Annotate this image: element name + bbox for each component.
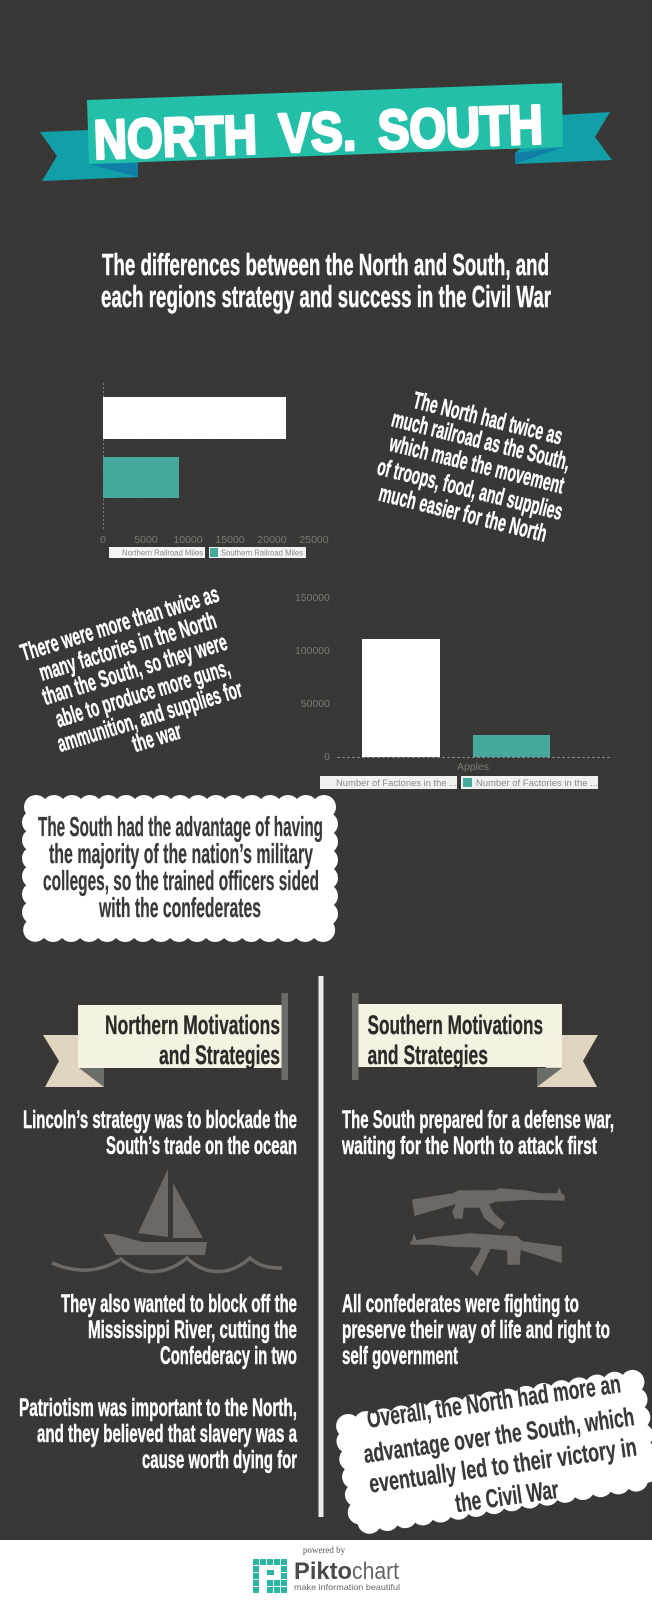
text: railroad advantage bbox=[374, 387, 573, 548]
center divider bbox=[318, 976, 324, 1517]
text: way of life bbox=[342, 1290, 610, 1370]
text: blockade strategy: South’s trade on the ocean bbox=[106, 1132, 297, 1160]
bar chart: railroad miles: 15000 bbox=[215, 534, 245, 546]
text: mississippi river: They also wanted to block off the bbox=[61, 1290, 297, 1318]
bar chart: factories: 100000 bbox=[295, 645, 330, 657]
bar chart: railroad miles: 5000 bbox=[134, 534, 158, 546]
footer: make information beautiful bbox=[294, 1582, 400, 1592]
title: NORTH bbox=[93, 103, 258, 171]
subtitle bbox=[101, 247, 551, 314]
text: blockade strategy: Lincoln’s strategy was to blockade the bbox=[23, 1106, 297, 1134]
text: factories advantage: able to produce more guns, bbox=[52, 654, 233, 733]
text: mississippi river: Mississippi River, cutting the bbox=[88, 1316, 297, 1344]
callout: military colleges: colleges, so the trained officers sided bbox=[43, 865, 319, 896]
text: way of life: self government bbox=[342, 1342, 458, 1370]
banner: northern heading: Northern Motivations bbox=[105, 1010, 280, 1040]
callout: military colleges: the majority of the nation’s military bbox=[49, 838, 313, 869]
text: patriotism: and they believed that slavery was a bbox=[37, 1420, 298, 1448]
title ribbon bbox=[40, 83, 612, 181]
bar chart: factories bbox=[295, 592, 612, 789]
text: patriotism: cause worth dying for bbox=[142, 1446, 297, 1474]
text: patriotism bbox=[19, 1394, 298, 1474]
powered by: powered by bbox=[303, 1545, 346, 1555]
banner: southern heading bbox=[352, 993, 598, 1087]
callout: overall conclusion: the Civil War bbox=[453, 1474, 560, 1518]
text: defense war bbox=[341, 1106, 614, 1160]
text: factories advantage: many factories in the North bbox=[36, 607, 220, 687]
icon: piktochart logo bbox=[253, 1559, 287, 1593]
bar chart: factories: Number of Factories in the ... bbox=[476, 778, 598, 788]
bar chart: factories: 50000 bbox=[301, 698, 330, 710]
text: factories advantage: than the South, so they were bbox=[39, 629, 231, 711]
piktochart wordmark: Pikto bbox=[294, 1558, 352, 1585]
callout: military colleges bbox=[34, 807, 326, 930]
title bbox=[93, 93, 544, 171]
bar chart: railroad miles: Southern Railroad Miles bbox=[221, 548, 303, 558]
icon: sailboat on waves bbox=[52, 1169, 282, 1272]
bar chart: factories: 0 bbox=[324, 751, 330, 763]
bar chart: railroad miles: 10000 bbox=[173, 534, 203, 546]
bar chart: factories: Apples bbox=[457, 761, 489, 773]
text: mississippi river bbox=[61, 1290, 297, 1370]
bar chart: railroad miles: 0 bbox=[100, 534, 106, 546]
bar chart: railroad miles: 25000 bbox=[299, 534, 329, 546]
bar chart: railroad miles: 20000 bbox=[257, 534, 287, 546]
bar chart: factories: 150000 bbox=[295, 592, 330, 604]
banner: northern heading: and Strategies bbox=[159, 1040, 280, 1070]
footer: chart bbox=[352, 1558, 399, 1585]
text: factories advantage bbox=[17, 581, 246, 758]
bar chart: railroad miles bbox=[100, 383, 329, 558]
callout: military colleges: The South had the advantage of having bbox=[38, 811, 323, 842]
footer bbox=[0, 1540, 652, 1600]
banner: southern heading: and Strategies bbox=[368, 1040, 488, 1070]
icon: rifles bbox=[411, 1189, 564, 1275]
text: mississippi river: Confederacy in two bbox=[160, 1342, 297, 1370]
bar chart: factories: Number of Factories in the ... bbox=[336, 778, 457, 788]
title: VS. bbox=[278, 100, 357, 164]
callout: military colleges: with the confederates bbox=[98, 892, 261, 923]
bar chart: railroad miles: Northern Railroad Miles bbox=[122, 548, 203, 558]
banner: northern heading bbox=[43, 993, 288, 1087]
text: factories advantage: the war bbox=[129, 718, 185, 758]
text: factories advantage: There were more than twice as bbox=[17, 581, 222, 667]
title: SOUTH bbox=[377, 93, 544, 161]
callout: overall conclusion bbox=[346, 1368, 648, 1523]
text: patriotism: Patriotism was important to the North, bbox=[19, 1394, 297, 1422]
banner: southern heading: Southern Motivations bbox=[368, 1010, 543, 1040]
text: blockade strategy bbox=[23, 1106, 297, 1160]
text: factories advantage: ammunition, and supplies for bbox=[54, 676, 246, 758]
